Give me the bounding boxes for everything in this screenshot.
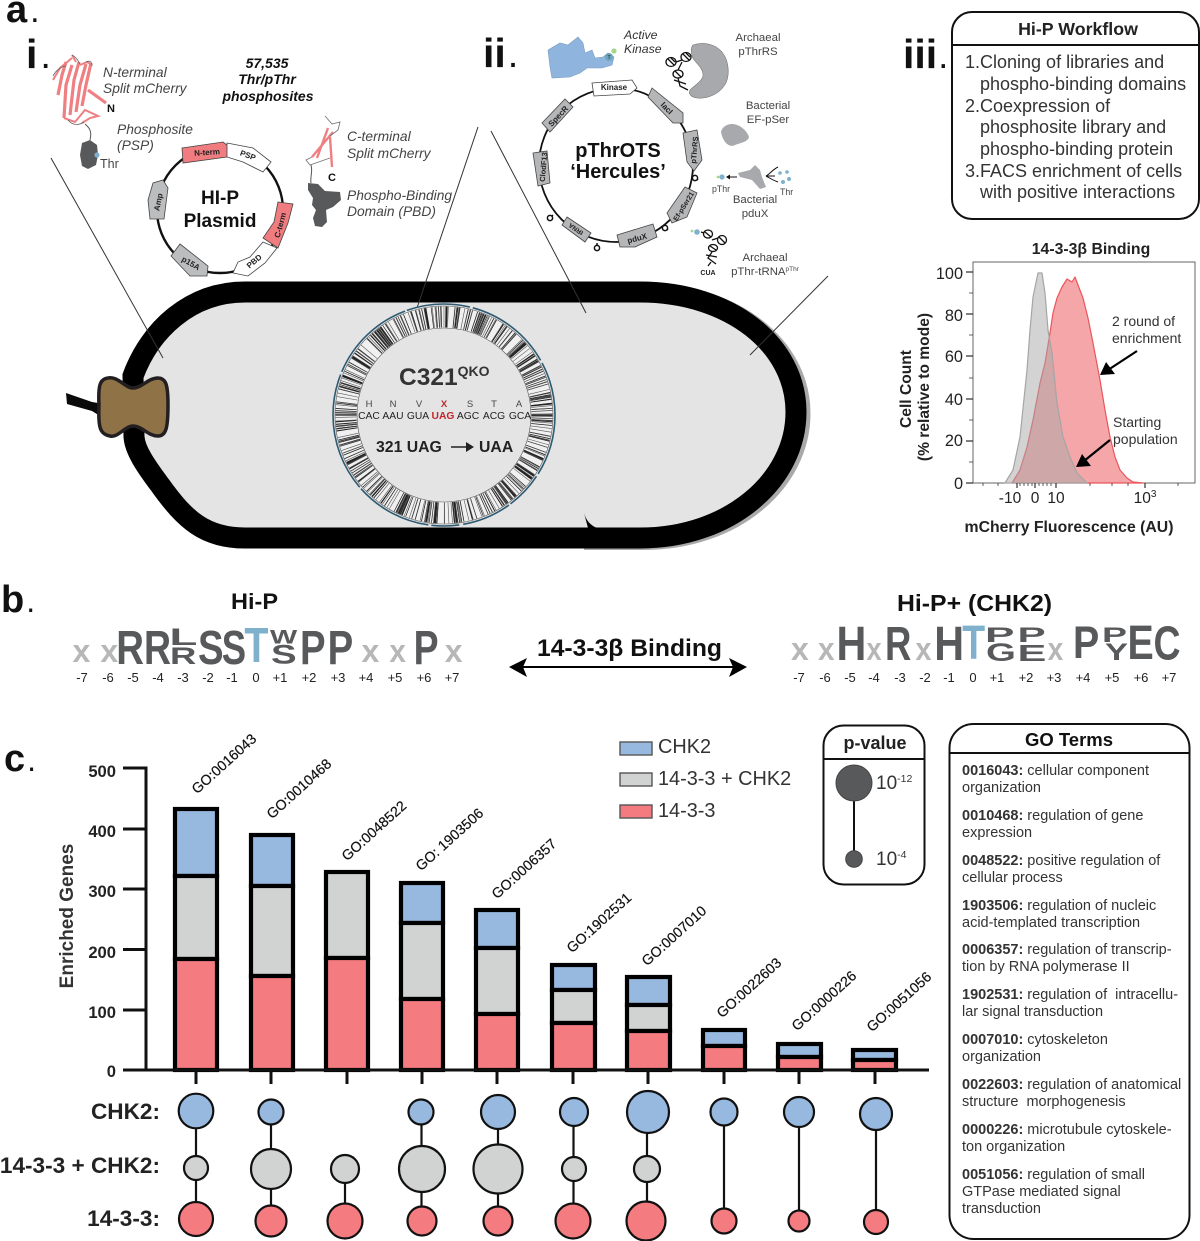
sequence logo: Hi-P: x <box>445 633 463 669</box>
position labels: Hi-P: -1 <box>226 670 238 685</box>
amino acid row: A <box>516 399 523 410</box>
position labels: Hi-P: +7 <box>445 670 459 685</box>
recoding statement: 321 UAG <box>376 439 442 456</box>
amino acid row <box>366 399 523 410</box>
panel: GO terms: ton organization <box>962 1139 1065 1155</box>
label: archaeal pThr-tRNA: Archaeal <box>743 252 787 264</box>
panel label b: b. <box>1 579 35 621</box>
label: C-terminal split mCherry: C-terminal <box>347 129 412 144</box>
sequence logo: Hi-P+: x <box>866 632 882 668</box>
panel: GO terms: GO Terms <box>1025 729 1113 750</box>
icon: bacterial EF-pSer <box>721 124 749 146</box>
chart: enriched genes stacked bars: GO:0016043 <box>189 731 260 797</box>
chart: enriched genes stacked bars: 500 <box>88 762 116 781</box>
panel: Hi-P workflow: 3.FACS enrichment of cells <box>965 161 1182 181</box>
panel label iii: iii. <box>903 31 948 77</box>
panel: Hi-P workflow: phosphosite library and <box>980 117 1166 137</box>
panel: GO terms: transduction <box>962 1201 1041 1217</box>
chart: flow cytometry histogram <box>898 241 1195 536</box>
label: pThr: pThr <box>712 184 730 194</box>
chart: enriched genes stacked bars: GO:0007010 <box>639 903 710 969</box>
chart: enriched genes stacked bars: 300 <box>88 882 116 901</box>
sequence logo: Hi-P: R <box>170 642 196 669</box>
label: bacterial EF-pSer: EF-pSer <box>747 114 789 126</box>
position labels: Hi-P: 0 <box>252 670 260 685</box>
panel label ii: ii. <box>483 30 518 76</box>
position labels: Hi-P+ <box>793 670 1176 685</box>
sequence logo: Hi-P+: R <box>885 617 911 671</box>
position labels: Hi-P+: -3 <box>894 670 906 685</box>
label: archaeal pThrRS <box>736 32 780 58</box>
sequence logo: Hi-P: S <box>271 639 297 669</box>
chart: flow cytometry histogram: population <box>1113 431 1178 447</box>
panel: GO terms: lar signal transduction <box>962 1004 1103 1020</box>
recoding statement <box>376 439 513 456</box>
chart: flow cytometry histogram: 0 <box>954 475 963 493</box>
panel: GO terms <box>950 724 1190 1239</box>
codon row: UAG <box>432 411 454 422</box>
codon row: AGC <box>457 411 480 422</box>
label: C-terminal split mCherry: Split mCherry <box>347 146 432 161</box>
dot matrix <box>179 1091 892 1240</box>
sequence logo: Hi-P: P <box>328 622 353 675</box>
position labels: Hi-P: +1 <box>273 670 287 685</box>
label: CUA: CUA <box>700 270 716 277</box>
chart: flow cytometry histogram: Cell Count <box>898 350 915 428</box>
chart: enriched genes stacked bars: 200 <box>88 943 116 962</box>
chart: enriched genes stacked bars: 100 <box>88 1003 116 1022</box>
position labels: Hi-P+: -1 <box>943 670 955 685</box>
chart: flow cytometry histogram: 2 round of <box>1112 313 1175 329</box>
label: phosphosite: (PSP) <box>117 138 154 153</box>
panel: Hi-P workflow: with positive interactions <box>979 182 1175 202</box>
panel: GO terms: 0007010: cytoskeleton <box>962 1032 1108 1048</box>
p-value legend: 10 <box>876 849 897 870</box>
sequence logo: Hi-P+: P <box>1102 623 1127 647</box>
amino acid row: N <box>390 399 397 410</box>
heading: Hi-P+ (CHK2): Hi-P+ (CHK2) <box>897 590 1052 616</box>
p-value legend: -12 <box>897 773 912 785</box>
position labels: Hi-P+: +2 <box>1019 670 1033 685</box>
position labels: Hi-P: +6 <box>417 670 431 685</box>
double arrow <box>509 658 747 677</box>
position labels: Hi-P: +5 <box>388 670 402 685</box>
position labels: Hi-P: -4 <box>152 670 164 685</box>
genome map C321 <box>333 304 555 526</box>
chart: enriched genes stacked bars: 0 <box>107 1062 116 1081</box>
Hi-P plasmid <box>148 142 293 276</box>
p-value legend <box>824 726 924 884</box>
pThrOTS Hercules plasmid: ‘Hercules’ <box>570 161 666 183</box>
Hi-P plasmid: HI-P <box>201 188 239 209</box>
pThrOTS Hercules plasmid: lacI <box>659 100 675 116</box>
genome label C321QKO: C321 <box>399 364 458 391</box>
icon: phospho-binding domain <box>308 183 341 227</box>
codon row: ACG <box>483 411 505 422</box>
amino acid row: X <box>441 399 448 410</box>
label: C: C <box>328 172 336 184</box>
chart: flow cytometry histogram: mCherry Fluorescence (AU) <box>965 519 1173 536</box>
panel label c: c. <box>4 738 36 780</box>
phosphosite count <box>221 55 314 104</box>
label: bacterial pduX: Bacterial <box>733 194 777 206</box>
position labels: Hi-P+: -7 <box>793 670 805 685</box>
sequence logo: Hi-P+: Y <box>1105 639 1128 666</box>
icon: phosphosite peptide <box>80 140 100 169</box>
row labels: 14-3-3 + CHK2: <box>0 1153 160 1178</box>
chart: enriched genes stacked bars: GO:0048522 <box>339 798 410 864</box>
icon: bacterial pduX reaction <box>717 165 791 189</box>
panel: GO terms: 0048522: positive regulation of <box>962 853 1161 869</box>
position labels: Hi-P: +2 <box>302 670 316 685</box>
sequence logo: Hi-P: L <box>170 623 197 650</box>
icon: pThr-tRNA <box>691 229 726 266</box>
chart: flow cytometry histogram: 10 <box>1047 490 1065 507</box>
chart: enriched genes stacked bars: GO:0000226 <box>789 968 860 1034</box>
chart: flow cytometry histogram: 20 <box>945 432 963 450</box>
Hi-P plasmid: Amp <box>152 192 165 212</box>
heading: 14-3-3 beta binding: 14-3-3β Binding <box>537 635 722 662</box>
row labels: CHK2: <box>91 1099 160 1124</box>
Hi-P plasmid: p15A <box>180 255 202 272</box>
phosphosite count: 57,535 <box>246 55 289 71</box>
legend: 14-3-3 + CHK2 <box>658 768 791 790</box>
sequence logo: Hi-P: x <box>72 633 90 669</box>
chart: flow cytometry histogram: -10 <box>999 490 1022 507</box>
chart: flow cytometry histogram: 100 <box>936 265 963 283</box>
chart: enriched genes stacked bars <box>57 731 935 1084</box>
panel label i: i. <box>26 31 51 77</box>
label: phosphosite <box>117 122 193 153</box>
chart: flow cytometry histogram: 80 <box>945 307 963 325</box>
sequence logo: Hi-P+: H <box>934 617 964 671</box>
Hi-P plasmid: PSP <box>239 149 258 163</box>
pThrOTS Hercules plasmid: pThrRS <box>689 136 700 164</box>
icon: active kinase <box>548 37 617 78</box>
amino acid row: H <box>366 399 373 410</box>
chart: flow cytometry histogram: 3 <box>1151 489 1157 500</box>
label: active kinase: Kinase <box>624 42 662 56</box>
panel: GO terms: 0000226: microtubule cytoskele- <box>962 1122 1172 1138</box>
label: bacterial pduX <box>733 194 777 220</box>
position labels: Hi-P+: +1 <box>990 670 1004 685</box>
p-value legend: 10 <box>876 773 897 794</box>
panel: GO terms: expression <box>962 825 1032 841</box>
sequence logo: Hi-P+: H <box>836 617 866 671</box>
label: bacterial EF-pSer <box>746 100 790 126</box>
p-value legend: -4 <box>897 849 907 861</box>
recoding statement: UAA <box>479 439 513 456</box>
panel: GO terms: acid-templated transcription <box>962 915 1140 931</box>
codon row: GUA <box>407 411 429 422</box>
label: archaeal pThr-tRNA: pThr-tRNA <box>731 266 786 278</box>
label: archaeal pThr-tRNA: pThr <box>786 266 800 273</box>
panel: Hi-P workflow <box>952 12 1199 219</box>
label: phospho-binding domain: Domain (PBD) <box>347 204 436 219</box>
chart: flow cytometry histogram: 14-3-3β Binding <box>1032 241 1150 258</box>
sequence logo: Hi-P: x <box>100 633 118 669</box>
position labels: Hi-P+: 0 <box>969 670 977 685</box>
chart: flow cytometry histogram: Starting <box>1113 414 1161 430</box>
chart: flow cytometry histogram: (% relative to mode) <box>916 313 933 461</box>
pThrOTS Hercules plasmid: Kinase <box>601 83 628 92</box>
amino acid row: T <box>491 399 497 410</box>
legend: CHK2 <box>658 736 711 758</box>
label: N-terminal split mCherry <box>103 65 188 96</box>
sequence logo: Hi-P+: x <box>916 632 932 667</box>
sequence logo: Hi-P+ <box>791 616 1181 671</box>
pThrOTS Hercules plasmid <box>533 80 702 251</box>
panel: GO terms: 1902531: regulation of intracellu- <box>962 987 1178 1003</box>
panel: GO terms: 1903506: regulation of nucleic <box>962 898 1156 914</box>
chart: flow cytometry histogram: 10 <box>1134 490 1151 507</box>
zoom callout lines <box>51 127 828 358</box>
panel: GO terms: GTPase mediated signal <box>962 1184 1121 1200</box>
chart: enriched genes stacked bars: GO:0051056 <box>864 969 935 1035</box>
sequence logo: Hi-P: W <box>270 627 298 648</box>
pThrOTS Hercules plasmid: ClodF13 <box>538 152 549 182</box>
panel: GO terms: structure morphogenesis <box>962 1094 1126 1110</box>
chart: enriched genes stacked bars: GO:0006357 <box>489 836 560 902</box>
codon row: AAU <box>382 411 404 422</box>
Hi-P plasmid: Plasmid <box>184 211 256 232</box>
genome label C321QKO: QKO <box>458 363 490 379</box>
chart: enriched genes stacked bars: GO:1902531 <box>564 890 635 956</box>
panel: GO terms: 0022603: regulation of anatomical <box>962 1077 1181 1093</box>
phosphosite count: phosphosites <box>221 88 314 104</box>
icon: C-terminal split mCherry <box>306 116 340 183</box>
label: archaeal pThr-tRNA <box>731 252 800 278</box>
position labels: Hi-P: -3 <box>177 670 189 685</box>
panel: GO terms: 0006357: regulation of transcrip- <box>962 942 1172 958</box>
label: bacterial EF-pSer: Bacterial <box>746 100 790 112</box>
row labels: 14-3-3: <box>87 1206 160 1231</box>
sequence logo: Hi-P: x <box>389 633 406 669</box>
position labels: Hi-P+: -2 <box>919 670 931 685</box>
panel: Hi-P workflow: 2.Coexpression of <box>965 96 1111 116</box>
icon: archaeal pThrRS <box>689 43 728 98</box>
sequence logo: Hi-P: R <box>116 622 144 675</box>
label: N-terminal split mCherry: Split mCherry <box>103 81 188 96</box>
pThrOTS Hercules plasmid: Ef-pSer21 <box>673 191 696 223</box>
sequence logo: Hi-P: P <box>300 622 326 675</box>
chart: flow cytometry histogram: 40 <box>945 391 963 409</box>
sequence logo: Hi-P+: G <box>986 639 1016 666</box>
chart: enriched genes stacked bars: 400 <box>88 822 116 841</box>
label: N: N <box>107 103 115 115</box>
chart: enriched genes stacked bars: GO:0010468 <box>264 756 335 822</box>
position labels: Hi-P+: -4 <box>868 670 880 685</box>
panel: Hi-P workflow: phospho-binding protein <box>980 139 1173 159</box>
chart: enriched genes stacked bars: Enriched Genes <box>57 844 78 988</box>
sequence logo: Hi-P+: C <box>1154 617 1181 671</box>
sequence logo: Hi-P+: x <box>791 631 809 667</box>
panel: GO terms: cellular process <box>962 870 1063 886</box>
label: phospho-binding domain <box>347 188 452 219</box>
label: archaeal pThrRS: pThrRS <box>738 46 778 58</box>
legend: 14-3-3 <box>658 800 716 822</box>
sequence logo: Hi-P: P <box>414 622 439 675</box>
label: N-terminal split mCherry: N-terminal <box>103 65 168 80</box>
row labels <box>0 1099 160 1231</box>
sequence logo: Hi-P+: E <box>1128 616 1154 670</box>
icon: tRNA bound to pThrRS <box>666 52 691 90</box>
pThrOTS Hercules plasmid: pduX <box>626 231 649 245</box>
sequence logo: Hi-P: R <box>144 622 171 675</box>
panel: GO terms: 0016043: cellular component <box>962 763 1149 779</box>
label: Thr: Thr <box>780 187 793 197</box>
bacterial cell <box>133 292 800 540</box>
flagellum tail <box>66 393 100 416</box>
sequence logo: Hi-P+: P <box>985 623 1014 647</box>
sequence logo: Hi-P: S <box>198 622 224 675</box>
position labels: Hi-P+: +4 <box>1076 670 1090 685</box>
flagellar motor <box>99 378 168 436</box>
panel: GO terms: 0010468: regulation of gene <box>962 808 1143 824</box>
sequence logo: Hi-P: x <box>362 633 380 669</box>
phosphosite count: Thr/pThr <box>238 71 297 87</box>
Hi-P plasmid: PBD <box>245 252 264 270</box>
panel: GO terms: organization <box>962 1049 1041 1065</box>
position labels: Hi-P: +3 <box>331 670 345 685</box>
label: phosphosite: Phosphosite <box>117 122 193 137</box>
position labels: Hi-P: -5 <box>127 670 139 685</box>
legend <box>620 736 791 822</box>
position labels: Hi-P <box>76 670 459 685</box>
pThrOTS Hercules plasmid: tRNA <box>567 221 585 236</box>
sequence logo: Hi-P+: x <box>1048 632 1063 667</box>
codon row: GCA <box>509 411 531 422</box>
label: bacterial pduX: pduX <box>742 208 769 220</box>
label: archaeal pThrRS: Archaeal <box>736 32 780 44</box>
panel: GO terms: tion by RNA polymerase II <box>962 959 1130 975</box>
panel: GO terms: organization <box>962 780 1041 796</box>
amino acid row: S <box>467 399 473 410</box>
label: Thr: Thr <box>100 157 119 171</box>
position labels: Hi-P: -7 <box>76 670 88 685</box>
icon: active kinase: T <box>607 55 611 61</box>
sequence logo: Hi-P+: P <box>1018 623 1046 647</box>
position labels: Hi-P+: +3 <box>1047 670 1061 685</box>
position labels: Hi-P+: +6 <box>1134 670 1148 685</box>
sequence logo: Hi-P <box>72 619 463 675</box>
position labels: Hi-P+: -6 <box>819 670 831 685</box>
Hi-P plasmid: N-term <box>194 147 220 158</box>
position labels: Hi-P: -2 <box>202 670 214 685</box>
chart: flow cytometry histogram: 0 <box>1031 490 1040 507</box>
sequence logo: Hi-P+: E <box>1018 641 1046 666</box>
icon: N-terminal split mCherry <box>53 55 106 140</box>
p-value legend: p-value <box>843 733 907 753</box>
sequence logo: Hi-P+: x <box>818 631 835 667</box>
panel: Hi-P workflow: phospho-binding domains <box>980 74 1186 94</box>
position labels: Hi-P+: -5 <box>844 670 856 685</box>
sequence logo: Hi-P: S <box>222 621 246 675</box>
heading: Hi-P: Hi-P <box>231 589 278 614</box>
amino acid row: V <box>416 399 423 410</box>
chart: enriched genes stacked bars: GO:0022603 <box>714 955 785 1021</box>
codon row <box>358 411 531 422</box>
position labels: Hi-P+: +7 <box>1162 670 1176 685</box>
pThrOTS Hercules plasmid: pThrOTS <box>575 140 661 162</box>
position labels: Hi-P+: +5 <box>1105 670 1119 685</box>
pThrOTS Hercules plasmid: SpecR <box>547 104 570 129</box>
label: phospho-binding domain: Phospho-Binding <box>347 188 452 203</box>
sequence logo: Hi-P: T <box>244 619 268 673</box>
chart: flow cytometry histogram: 60 <box>945 348 963 366</box>
position labels: Hi-P: +4 <box>359 670 373 685</box>
chart: enriched genes stacked bars: GO: 1903506 <box>413 806 487 874</box>
label: active kinase: Active <box>623 28 658 42</box>
sequence logo: Hi-P+: P <box>1073 617 1099 669</box>
label: active kinase <box>623 28 662 56</box>
Hi-P plasmid: C-term <box>273 212 288 239</box>
panel: Hi-P workflow: Hi-P Workflow <box>1018 19 1138 39</box>
position labels: Hi-P: -6 <box>102 670 114 685</box>
chart: flow cytometry histogram: enrichment <box>1112 330 1181 346</box>
label: C-terminal split mCherry <box>347 129 432 161</box>
panel: GO terms: 0051056: regulation of small <box>962 1167 1145 1183</box>
panel: Hi-P workflow: 1.Cloning of libraries and <box>965 52 1164 72</box>
codon row: CAC <box>358 411 380 422</box>
sequence logo: Hi-P+: T <box>962 617 985 670</box>
